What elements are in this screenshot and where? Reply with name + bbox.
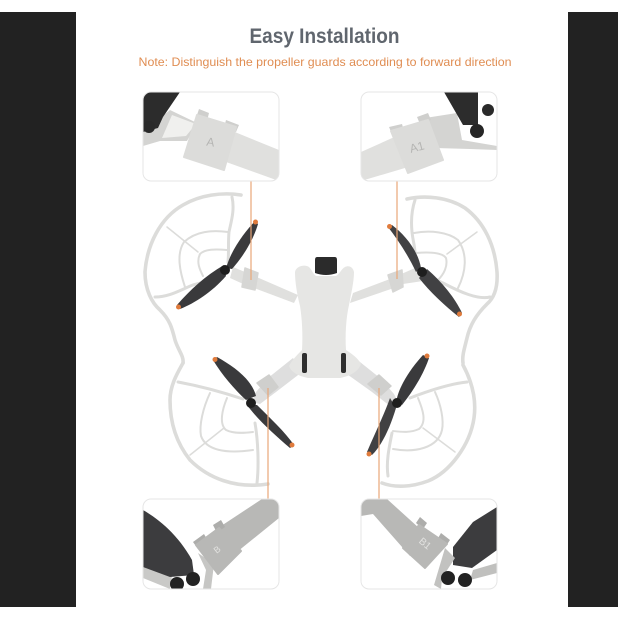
leader line: bottom right <box>378 388 380 499</box>
guard: top left <box>145 194 241 363</box>
panel: detail B1 <box>361 499 497 589</box>
clamp: top right <box>388 270 403 292</box>
leader line: top right <box>396 181 398 279</box>
leader line: top left <box>250 181 252 280</box>
title: Easy Installation <box>250 25 400 48</box>
clamp letter A1: A1 <box>408 138 426 156</box>
propeller: bottom right <box>366 354 430 456</box>
panel: detail A1 <box>361 92 497 181</box>
note: Note: Distinguish the propeller guards according to forward direction <box>138 55 511 69</box>
panel: detail B <box>143 499 279 591</box>
propeller: bottom left <box>212 357 294 448</box>
vent left <box>302 353 307 373</box>
clamp: top left <box>242 268 258 290</box>
left dark band <box>0 12 76 607</box>
clamp letter B: B <box>212 544 223 555</box>
vent right <box>341 353 346 373</box>
guard: bottom left <box>170 363 268 485</box>
propeller: top left <box>176 220 258 310</box>
leader line: bottom left <box>267 388 269 499</box>
arm: bottom right <box>344 358 398 406</box>
drone body <box>289 266 361 378</box>
camera <box>315 257 337 275</box>
propeller: top right <box>387 224 462 317</box>
arm: top left <box>230 267 298 303</box>
clamp: bottom left <box>257 375 278 395</box>
clamp letter B1: B1 <box>416 536 433 553</box>
guard: bottom right <box>382 365 475 486</box>
panel: detail A <box>143 92 279 181</box>
right dark band <box>568 12 618 607</box>
drone <box>230 257 423 406</box>
clamp letter A: A <box>206 135 215 150</box>
arm: top right <box>350 268 423 303</box>
guard: top right <box>407 197 497 363</box>
arm: bottom left <box>252 358 302 404</box>
clamp: bottom right <box>368 375 391 395</box>
